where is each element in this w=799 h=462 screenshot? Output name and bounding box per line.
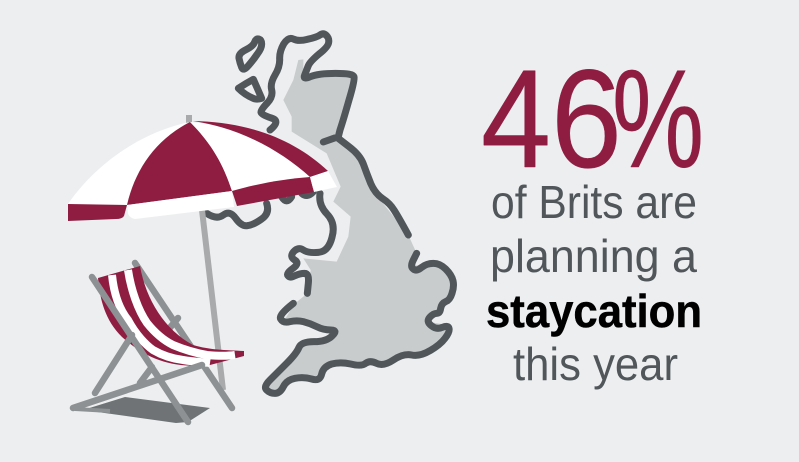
line: planning a: planning a <box>490 230 697 282</box>
deck chair <box>73 263 244 422</box>
statistic: 46%: 6 <box>551 40 622 197</box>
chair rear frame <box>135 263 232 408</box>
chair foot rail <box>75 409 110 411</box>
statistic: 46%: 4 <box>481 40 551 197</box>
deck chair shadow <box>83 397 210 423</box>
map: United Kingdom <box>207 34 453 393</box>
line: staycation: staycation <box>486 285 702 337</box>
umbrella <box>68 115 337 390</box>
line: of Brits are: of Brits are <box>491 176 697 228</box>
chair front frame <box>73 277 202 422</box>
umbrella canopy <box>68 121 337 221</box>
statistic: 46% <box>481 40 704 197</box>
statistic: 46%: % <box>612 40 704 197</box>
chair canvas <box>98 266 244 366</box>
text block: description <box>486 176 702 390</box>
umbrella pole <box>189 115 223 390</box>
line: this year: this year <box>513 338 678 390</box>
